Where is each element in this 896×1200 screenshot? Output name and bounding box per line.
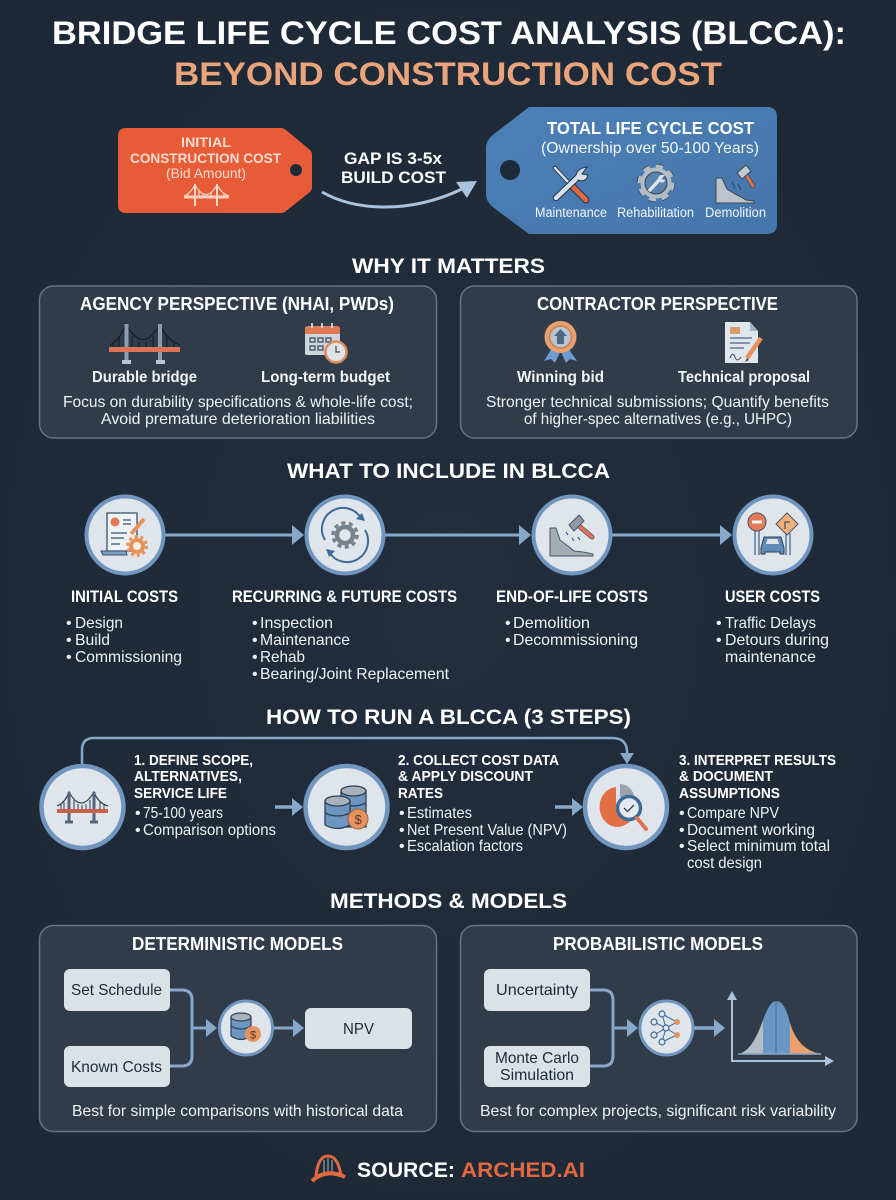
column: recurring and future costs: RECURRING & FUTURE COSTS bbox=[232, 588, 457, 606]
icon: arched logo bbox=[312, 1156, 345, 1181]
heading: why it matters: WHY IT MATTERS bbox=[352, 254, 545, 278]
column: recurring and future costs bbox=[232, 588, 457, 683]
step 2 text: • bbox=[399, 822, 405, 839]
box: uncertainty bbox=[484, 969, 590, 1011]
icon: step 2 database and coin circle bbox=[306, 766, 388, 848]
step 2 text: & APPLY DISCOUNT bbox=[398, 768, 533, 785]
panel: contractor perspective: Stronger technical submissions; Quantify benefits bbox=[486, 394, 829, 411]
column: end-of-life costs: Decommissioning bbox=[513, 632, 638, 649]
arrow: recurring to end-of-life bbox=[385, 525, 531, 545]
step 2 text: Escalation factors bbox=[407, 838, 523, 855]
box: uncertainty: Uncertainty bbox=[496, 982, 578, 999]
title: BRIDGE LIFE CYCLE COST ANALYSIS (BLCCA): bbox=[52, 15, 846, 51]
panel: agency perspective: Avoid premature deterioration liabilities bbox=[101, 411, 375, 428]
icon: recurring costs circle bbox=[306, 496, 384, 574]
price tag: initial construction cost: INITIAL bbox=[181, 134, 231, 150]
panel: contractor perspective: Technical proposal bbox=[678, 369, 810, 386]
column: user costs: maintenance bbox=[725, 649, 816, 666]
column: initial costs: Design bbox=[75, 615, 123, 632]
panel: deterministic models bbox=[40, 926, 436, 1132]
column: initial costs: Commissioning bbox=[75, 649, 182, 666]
arrow: database to NPV bbox=[274, 1019, 304, 1037]
step 2 text: RATES bbox=[398, 785, 443, 802]
step 3 text: & DOCUMENT bbox=[679, 768, 773, 785]
column: recurring and future costs: • bbox=[252, 615, 258, 632]
column: end-of-life costs: Demolition bbox=[513, 615, 590, 632]
arrow: inputs to network bbox=[590, 990, 638, 1066]
step 3 text: cost design bbox=[687, 855, 762, 872]
gap callout with arrow: GAP IS 3-5x bbox=[344, 149, 443, 168]
box: NPV: NPV bbox=[343, 1021, 374, 1038]
arrow: initial to recurring bbox=[164, 525, 304, 545]
heading: how to run: HOW TO RUN A BLCCA (3 STEPS) bbox=[266, 705, 631, 729]
step 2 text bbox=[398, 752, 567, 855]
column: recurring and future costs: Rehab bbox=[260, 649, 305, 666]
column: end-of-life costs: END-OF-LIFE COSTS bbox=[496, 588, 648, 606]
step 3 text: ASSUMPTIONS bbox=[679, 785, 780, 802]
box: monte carlo simulation bbox=[484, 1046, 590, 1087]
arrow: end-of-life to user costs bbox=[612, 525, 732, 545]
column: user costs bbox=[716, 588, 829, 666]
price tag: total life cycle cost: TOTAL LIFE CYCLE COST bbox=[547, 118, 754, 138]
column: initial costs bbox=[66, 588, 182, 666]
step 3 text: • bbox=[679, 838, 685, 855]
price tag: total life cycle cost: Maintenance bbox=[535, 205, 607, 220]
price tag: total life cycle cost: Rehabilitation bbox=[617, 205, 694, 220]
price tag: total life cycle cost: Demolition bbox=[705, 205, 766, 220]
panel: agency perspective: Long-term budget bbox=[261, 369, 391, 386]
arrow: step 1 to step 3 connector bbox=[82, 738, 634, 764]
column: recurring and future costs: Bearing/Joint Replacement bbox=[260, 666, 450, 683]
icon: network circle bbox=[640, 1001, 693, 1055]
price tag: initial construction cost: CONSTRUCTION COST bbox=[130, 150, 281, 166]
step 2 text: 2. COLLECT COST DATA bbox=[398, 752, 559, 769]
box: monte carlo simulation: Simulation bbox=[500, 1067, 574, 1084]
column: initial costs: • bbox=[66, 615, 72, 632]
icon: gear with wrench bbox=[640, 167, 672, 199]
arrow: network to chart bbox=[694, 1019, 725, 1037]
box: monte carlo simulation: Monte Carlo bbox=[495, 1050, 579, 1067]
icon: long-term budget calendar bbox=[305, 323, 346, 362]
panel: probabilistic models: Best for complex projects, significant risk variability bbox=[480, 1103, 836, 1120]
footer: source: SOURCE: bbox=[357, 1159, 455, 1182]
icon: database circle bbox=[220, 1001, 272, 1055]
icon: user costs circle bbox=[734, 496, 812, 574]
panel: deterministic models: DETERMINISTIC MODELS bbox=[132, 934, 343, 954]
column: user costs: Detours during bbox=[725, 632, 829, 649]
column: end-of-life costs bbox=[496, 588, 648, 649]
column: initial costs: • bbox=[66, 632, 72, 649]
price tag: total life cycle cost: (Ownership over 50-100 Years) bbox=[541, 140, 759, 157]
panel: contractor perspective: Winning bid bbox=[517, 369, 604, 386]
icon: winning bid medal bbox=[544, 321, 577, 363]
column: initial costs: INITIAL COSTS bbox=[71, 588, 178, 606]
box: NPV bbox=[305, 1008, 412, 1049]
step 2 text: Net Present Value (NPV) bbox=[407, 822, 567, 839]
gap callout with arrow: BUILD COST bbox=[341, 168, 447, 187]
step 2 text: Estimates bbox=[407, 805, 472, 822]
icon: durable bridge bbox=[109, 324, 180, 362]
column: initial costs: • bbox=[66, 649, 72, 666]
arrow: inputs to database bbox=[170, 990, 217, 1066]
step 1 text: 1. DEFINE SCOPE, bbox=[134, 752, 253, 769]
panel: agency perspective: AGENCY PERSPECTIVE (NHAI, PWDs) bbox=[80, 294, 394, 314]
icon: end-of-life circle bbox=[534, 496, 610, 574]
panel: contractor perspective: CONTRACTOR PERSPECTIVE bbox=[537, 294, 778, 314]
arrow: gap curve bbox=[322, 181, 477, 207]
arrow: step 2 to step 3 bbox=[555, 798, 583, 816]
column: user costs: • bbox=[716, 632, 722, 649]
icon: initial costs circle bbox=[86, 496, 164, 574]
gap callout with arrow bbox=[322, 149, 477, 207]
icon: step 2 database and coin circle: $ bbox=[354, 812, 362, 827]
step 1 text: ALTERNATIVES, bbox=[134, 768, 242, 785]
icon: wrench and screwdriver bbox=[555, 167, 588, 200]
box: set schedule: Set Schedule bbox=[71, 982, 162, 999]
step 1 text bbox=[134, 752, 276, 839]
column: recurring and future costs: Inspection bbox=[260, 615, 333, 632]
step 1 text: 75-100 years bbox=[143, 805, 223, 822]
column: recurring and future costs: Maintenance bbox=[260, 632, 350, 649]
column: end-of-life costs: • bbox=[505, 632, 511, 649]
column: recurring and future costs: • bbox=[252, 649, 258, 666]
title: BEYOND CONSTRUCTION COST bbox=[174, 56, 722, 92]
price tag: initial construction cost: (Bid Amount) bbox=[166, 165, 246, 181]
panel: probabilistic models bbox=[460, 926, 857, 1132]
step 1 text: Comparison options bbox=[143, 822, 276, 839]
step 2 text: • bbox=[399, 838, 405, 855]
footer: source bbox=[312, 1156, 585, 1182]
column: user costs: Traffic Delays bbox=[725, 615, 816, 632]
column: end-of-life costs: • bbox=[505, 615, 511, 632]
step 3 text: 3. INTERPRET RESULTS bbox=[679, 752, 836, 769]
panel: contractor perspective: of higher-spec alternatives (e.g., UHPC) bbox=[524, 411, 792, 428]
icon: technical proposal document bbox=[725, 322, 761, 363]
panel: probabilistic models: PROBABILISTIC MODELS bbox=[553, 934, 763, 954]
chart: probability distribution bbox=[727, 991, 834, 1066]
panel: contractor perspective bbox=[460, 286, 857, 438]
step 3 text: Document working bbox=[687, 822, 815, 839]
step 3 text bbox=[679, 752, 836, 872]
icon: database circle: $ bbox=[250, 1030, 256, 1042]
arrow: step 1 to step 2 bbox=[275, 798, 303, 816]
column: user costs: USER COSTS bbox=[725, 588, 820, 606]
heading: what to include: WHAT TO INCLUDE IN BLCCA bbox=[287, 459, 610, 483]
panel: agency perspective bbox=[40, 286, 436, 438]
step 1 text: • bbox=[135, 805, 141, 822]
step 3 text: • bbox=[679, 822, 685, 839]
price tag: total life cycle cost bbox=[486, 107, 777, 234]
column: recurring and future costs: • bbox=[252, 632, 258, 649]
step 3 text: Compare NPV bbox=[687, 805, 779, 822]
step 1 text: • bbox=[135, 822, 141, 839]
panel: agency perspective: Focus on durability specifications & whole-life cost; bbox=[63, 394, 413, 411]
panel: deterministic models: Best for simple comparisons with historical data bbox=[72, 1103, 403, 1120]
box: set schedule bbox=[64, 969, 170, 1011]
title bbox=[52, 15, 846, 92]
icon: step 1 bridge circle bbox=[42, 766, 124, 848]
step 3 text: • bbox=[679, 805, 685, 822]
column: initial costs: Build bbox=[75, 632, 110, 649]
panel: agency perspective: Durable bridge bbox=[92, 369, 197, 386]
icon: small bridge bbox=[184, 184, 229, 206]
column: user costs: • bbox=[716, 615, 722, 632]
icon: demolition hammer bbox=[716, 165, 754, 203]
step 3 text: Select minimum total bbox=[687, 838, 830, 855]
step 1 text: SERVICE LIFE bbox=[134, 785, 227, 802]
price tag: initial construction cost bbox=[118, 128, 312, 213]
box: known costs bbox=[64, 1046, 170, 1087]
column: recurring and future costs: • bbox=[252, 666, 258, 683]
box: known costs: Known Costs bbox=[71, 1059, 162, 1076]
step 2 text: • bbox=[399, 805, 405, 822]
heading: methods and models: METHODS & MODELS bbox=[330, 889, 567, 913]
footer: source: ARCHED.AI bbox=[461, 1159, 585, 1182]
icon: step 3 pie and magnifier circle bbox=[585, 766, 667, 848]
